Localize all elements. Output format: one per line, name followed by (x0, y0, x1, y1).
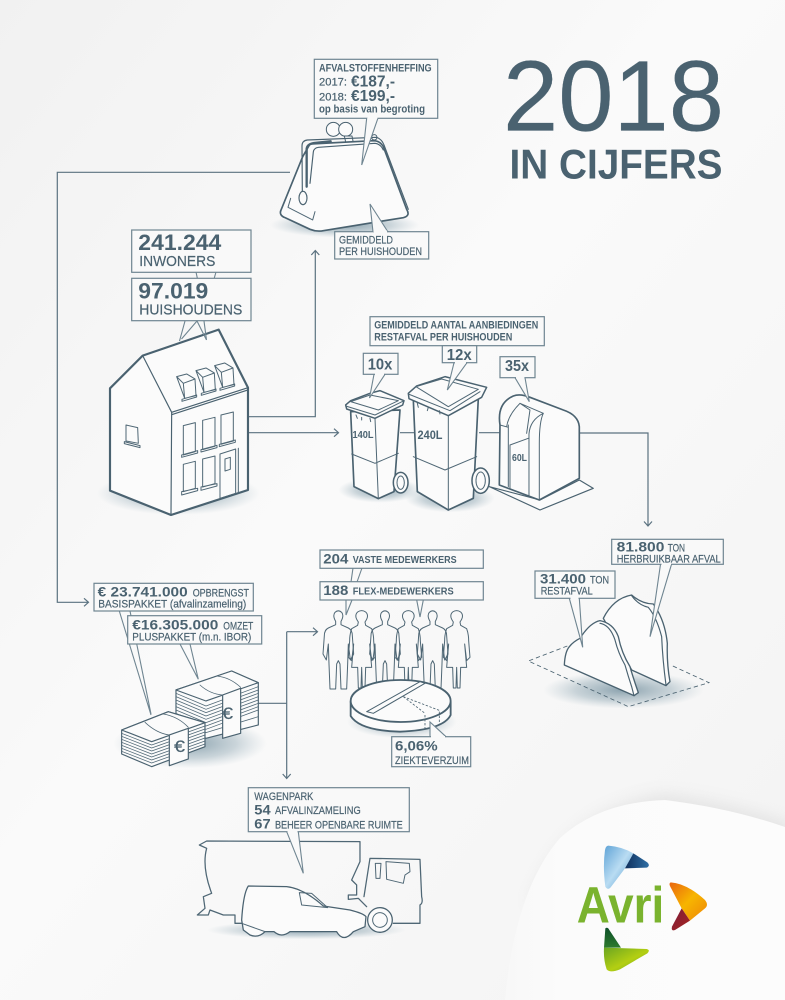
callout: afvalstoffenheffing: 2018: (319, 92, 347, 104)
callout: wagenpark: BEHEER OPENBARE RUIMTE (275, 819, 403, 831)
front stack (122, 712, 205, 767)
euro sign back: € (222, 704, 234, 723)
icon: 140 litre bin (338, 391, 422, 503)
callout: basispakket: € 23.741.000 (98, 584, 188, 600)
callout: basispakket (94, 583, 253, 715)
icon: underground container (489, 395, 593, 510)
callout: afvalstoffenheffing: AFVALSTOFFENHEFFING (319, 63, 432, 75)
callout: ziekteverzuim: 6,06% (395, 738, 438, 754)
label: 60L: 60L (512, 453, 527, 464)
callout: inwoners en huishoudens (132, 230, 251, 341)
callout: 10x: 10x (368, 356, 392, 373)
callout: aanbiedingen restafval (370, 317, 544, 346)
logo: Avri (577, 846, 707, 971)
callout: restafval: 31.400 (540, 570, 586, 586)
callout: pluspakket (128, 616, 262, 679)
callout: pluspakket: OMZET (223, 620, 254, 632)
van (242, 886, 366, 937)
callout: vaste medewerkers: 204 (323, 550, 349, 566)
callout: wagenpark: 67 (254, 816, 271, 832)
callout: herbruikbaar afval: 81.800 (617, 538, 665, 554)
euro sign front: € (174, 737, 186, 756)
callout: inwoners en huishoudens: 241.244 (138, 230, 222, 255)
icon: purse (270, 122, 420, 238)
callout: flex-medewerkers: 188 (323, 582, 349, 598)
callout: ziekteverzuim (392, 722, 471, 767)
callout: wagenpark: WAGENPARK (254, 791, 314, 803)
callout: herbruikbaar afval: TON (668, 542, 685, 554)
callout: inwoners en huishoudens: INWONERS (139, 253, 215, 270)
callout: inwoners en huishoudens: 97.019 (138, 278, 208, 303)
callout: 35x: 35x (505, 358, 529, 375)
callout: vaste medewerkers (320, 550, 483, 582)
callout: inwoners en huishoudens: HUISHOUDENS (139, 301, 242, 318)
logo blue petal (604, 846, 649, 889)
back stack (176, 671, 258, 738)
callout: restafval: TON (590, 574, 609, 586)
title: 2018 (503, 40, 724, 152)
callout: 12x: 12x (447, 347, 472, 364)
icon: money stacks (113, 671, 267, 768)
callout: afvalstoffenheffing: 2017: (319, 77, 347, 89)
callout: ziekteverzuim: ZIEKTEVERZUIM (395, 755, 469, 767)
callout: gemiddeld per huishouden: GEMIDDELD (339, 234, 393, 246)
pie chart (347, 680, 457, 738)
callout: afvalstoffenheffing: €199,- (351, 88, 395, 105)
title: IN CIJFERS (510, 140, 722, 187)
callout: herbruikbaar afval (612, 538, 723, 637)
background corner shape (505, 794, 785, 1000)
callout: basispakket: BASISPAKKET (afvalinzameling) (98, 598, 246, 610)
callout: 10x (363, 353, 398, 398)
label: 240L: 240L (418, 428, 442, 442)
icon: 240 litre bin (405, 377, 495, 512)
callout: afvalstoffenheffing (314, 59, 438, 165)
flow arrows (57, 172, 652, 779)
callout: 35x (500, 357, 535, 402)
callout: afvalstoffenheffing: €187,- (351, 74, 395, 90)
logo wordmark: Avri (577, 877, 664, 934)
callout: restafval: RESTAFVAL (541, 586, 593, 598)
callout: gemiddeld per huishouden: PER HUISHOUDEN (339, 246, 422, 258)
callout: herbruikbaar afval: HERBRUIKBAAR AFVAL (617, 554, 721, 566)
icon: house (97, 330, 260, 515)
truck (197, 841, 422, 932)
callout: wagenpark (248, 788, 409, 873)
callout: pluspakket: PLUSPAKKET (m.n. IBOR) (132, 632, 251, 644)
callout: flex-medewerkers: FLEX-MEDEWERKERS (353, 586, 454, 598)
callout: restafval (535, 570, 615, 647)
icon: waste mountains (528, 595, 709, 709)
callout: wagenpark: 54 (254, 801, 271, 817)
icon: vehicles (197, 841, 422, 939)
label: 140L: 140L (352, 430, 374, 441)
callout: afvalstoffenheffing: op basis van begroting (319, 104, 425, 116)
callout: wagenpark: AFVALINZAMELING (275, 805, 361, 817)
callout: vaste medewerkers: VASTE MEDEWERKERS (353, 554, 457, 566)
callout: 12x (442, 346, 477, 390)
callout: pluspakket: €16.305.000 (132, 616, 219, 632)
logo orange petal (669, 882, 707, 930)
icon: staff figures (323, 611, 470, 689)
callout: basispakket: OPBRENGST (193, 588, 249, 600)
dormer windows (177, 363, 235, 401)
callout: aanbiedingen restafval: RESTAFVAL PER HUISHOUDEN (374, 332, 512, 344)
callout: gemiddeld per huishouden (335, 204, 429, 259)
callout: flex-medewerkers (320, 582, 483, 617)
facade windows and door (124, 412, 238, 498)
callout: aanbiedingen restafval: GEMIDDELD AANTAL AANBIEDINGEN (374, 319, 538, 331)
logo green petal (604, 928, 649, 971)
